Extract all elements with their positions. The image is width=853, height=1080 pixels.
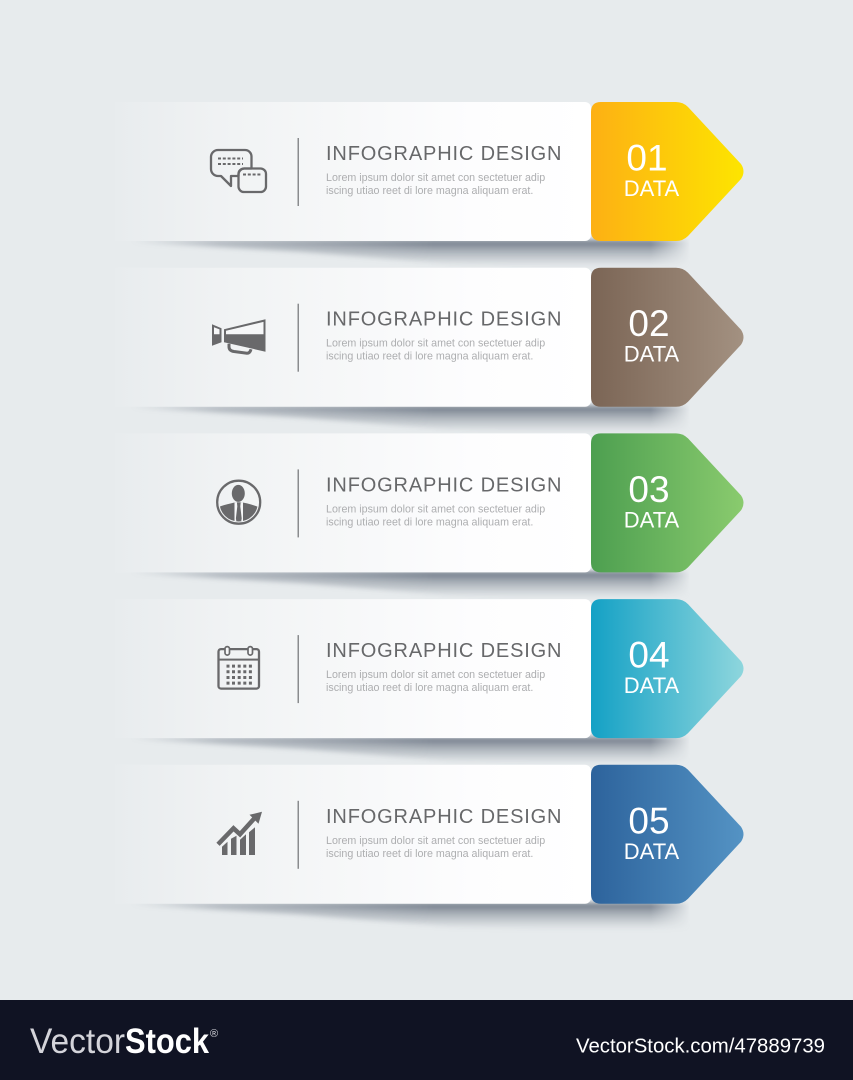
image id: VectorStock.com/47889739: [576, 1036, 825, 1058]
tab label: DATA: [624, 342, 680, 367]
panel shadow: [125, 903, 695, 931]
body text: Lorem ipsum dolor sit amet con sectetuer adip: [326, 669, 545, 681]
body text: Lorem ipsum dolor sit amet con sectetuer adip: [326, 338, 545, 350]
logo wordmark: Stock: [125, 1022, 209, 1061]
white panel: [115, 765, 591, 904]
logo wordmark: Vector: [30, 1022, 125, 1061]
heading: INFOGRAPHIC DESIGN: [326, 309, 562, 331]
row 05: [115, 765, 744, 931]
icon: businessman in circle: [217, 481, 260, 525]
white panel: [115, 102, 591, 241]
body text: iscing utiao reet di lore magna aliquam erat.: [326, 682, 533, 694]
arrow tab: [591, 599, 744, 738]
tab number: 05: [628, 800, 670, 841]
arrow tab: [591, 102, 744, 241]
arrow tab: [591, 268, 744, 407]
tab number: 01: [626, 138, 668, 178]
white panel: [115, 599, 591, 738]
divider: [298, 469, 299, 537]
tab label: DATA: [624, 176, 680, 201]
row 04: [115, 599, 744, 765]
icon: calendar: [218, 647, 259, 689]
body text: iscing utiao reet di lore magna aliquam erat.: [326, 185, 533, 197]
icon: chat bubbles: [211, 150, 266, 192]
arrow tab: [591, 765, 744, 904]
row 02: [115, 268, 744, 434]
body text: iscing utiao reet di lore magna aliquam erat.: [326, 516, 533, 528]
icon: growth chart: [218, 812, 262, 855]
body text: Lorem ipsum dolor sit amet con sectetuer adip: [326, 503, 545, 515]
tab number: 03: [628, 469, 670, 510]
tab label: DATA: [624, 839, 680, 864]
body text: iscing utiao reet di lore magna aliquam erat.: [326, 848, 533, 860]
white panel: [115, 268, 591, 407]
heading: INFOGRAPHIC DESIGN: [326, 143, 562, 165]
heading: INFOGRAPHIC DESIGN: [326, 640, 562, 662]
tab number: 02: [628, 303, 670, 344]
divider: [298, 635, 299, 703]
tab number: 04: [628, 635, 670, 676]
icon: megaphone: [212, 319, 266, 353]
body text: iscing utiao reet di lore magna aliquam erat.: [326, 351, 533, 363]
heading: INFOGRAPHIC DESIGN: [326, 474, 562, 496]
tab label: DATA: [624, 673, 680, 698]
panel shadow: [125, 737, 695, 765]
panel shadow: [125, 240, 695, 268]
footer bar: [0, 1000, 853, 1080]
row 03: [115, 433, 744, 599]
tab label: DATA: [624, 507, 680, 532]
registered mark: ®: [210, 1028, 218, 1040]
white panel: [115, 433, 591, 572]
body text: Lorem ipsum dolor sit amet con sectetuer adip: [326, 835, 545, 847]
panel shadow: [125, 406, 695, 434]
row 01: [115, 102, 744, 268]
divider: [298, 138, 299, 206]
divider: [298, 304, 299, 372]
divider: [298, 801, 299, 869]
heading: INFOGRAPHIC DESIGN: [326, 806, 562, 828]
panel shadow: [125, 571, 695, 599]
body text: Lorem ipsum dolor sit amet con sectetuer adip: [326, 172, 545, 184]
arrow tab: [591, 433, 744, 572]
